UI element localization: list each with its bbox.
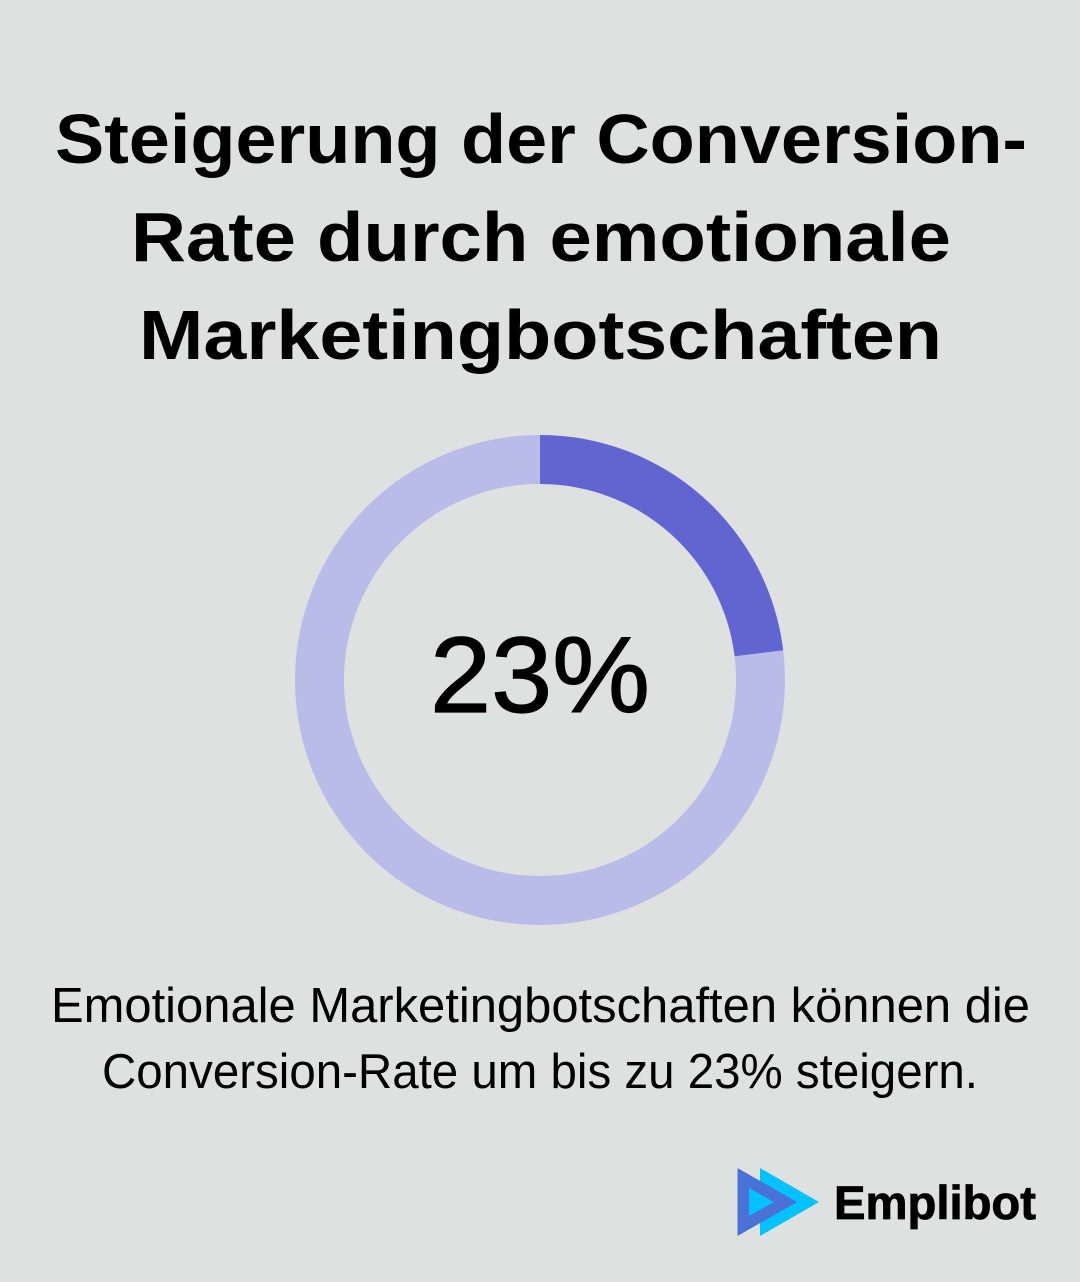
icon: play triangles — [738, 1168, 819, 1236]
donut chart — [320, 435, 783, 900]
title — [55, 100, 1027, 374]
title: Rate durch emotionale — [131, 198, 951, 276]
logo wordmark: Emplibot — [834, 1176, 1036, 1229]
logo — [738, 1168, 1036, 1236]
description text: Conversion-Rate um bis zu 23% steigern. — [102, 1045, 978, 1099]
title: Marketingbotschaften — [139, 296, 942, 374]
description text — [51, 979, 1030, 1099]
title: Steigerung der Conversion- — [55, 100, 1027, 178]
donut value: 23% — [430, 614, 650, 735]
description text: Emotionale Marketingbotschaften können die — [51, 979, 1030, 1033]
